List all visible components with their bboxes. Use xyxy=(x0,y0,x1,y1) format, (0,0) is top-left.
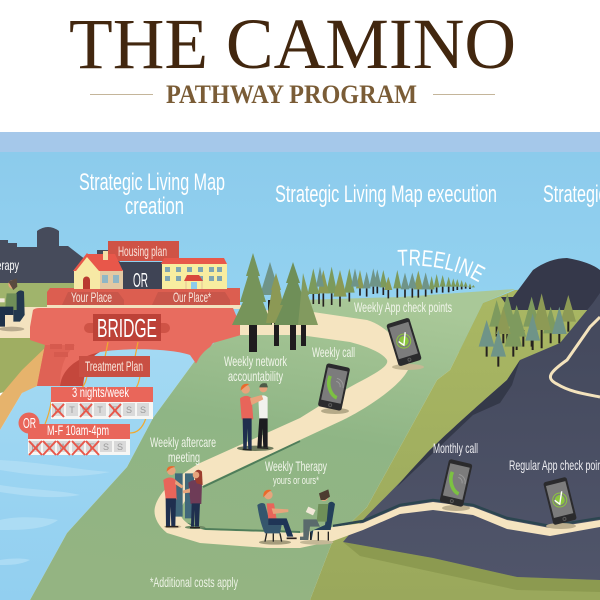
monthly call label: Monthly call xyxy=(433,440,478,456)
phone weekly call xyxy=(318,363,350,414)
schedule: M-F: M-F 10am-4pm xyxy=(47,422,109,438)
schedule: M-F: T xyxy=(46,442,52,452)
weekly therapy label xyxy=(265,458,327,487)
our place label: Our Place* xyxy=(173,289,211,305)
deck cream strip xyxy=(47,305,241,309)
OR circle xyxy=(18,412,40,434)
title: THE CAMINO xyxy=(69,4,516,84)
green land xyxy=(30,289,515,600)
schedule: 3 nights: T xyxy=(69,405,75,415)
weekly therapy label: yours or ours* xyxy=(273,475,319,487)
footnote: *Additional costs apply xyxy=(150,574,238,590)
heading: creation xyxy=(79,169,225,220)
dark city skyline xyxy=(0,227,162,290)
big tree trunks xyxy=(249,300,306,352)
connecting strings xyxy=(45,342,150,433)
aftercare label xyxy=(150,434,216,465)
schedule: M-F: S xyxy=(103,442,109,452)
people pair xyxy=(237,383,274,451)
olive shade under mountain xyxy=(343,542,600,592)
left road xyxy=(0,307,100,338)
water river xyxy=(0,345,200,600)
patient left xyxy=(0,278,25,331)
mountain xyxy=(343,293,600,580)
schedule: 3 nights xyxy=(51,384,153,419)
ground lower left xyxy=(0,336,50,393)
patient seated xyxy=(300,489,335,545)
meeting group xyxy=(163,466,205,529)
treeline curved label xyxy=(398,250,486,282)
bridge label: BRIDGE xyxy=(97,313,157,343)
schedule: M-F: S xyxy=(117,442,123,452)
road shadow xyxy=(180,441,300,532)
weekly network label: accountability xyxy=(228,368,283,384)
schedule: M-F: F xyxy=(89,442,95,452)
aftercare label: meeting xyxy=(168,449,200,465)
schedule: 3 nights: 3 nights/week xyxy=(72,384,130,400)
big trees xyxy=(232,253,318,325)
sky band xyxy=(0,132,600,152)
hill trees xyxy=(479,293,576,367)
treeline curved label: TREELINE xyxy=(398,250,486,282)
bridge deck xyxy=(47,288,240,305)
deck dark panels xyxy=(62,292,230,305)
olive hill xyxy=(310,285,600,600)
arch interior xyxy=(60,352,100,386)
schedule: 3 nights: W xyxy=(82,405,91,415)
heading: creation: creation xyxy=(125,193,184,220)
weekly call label: Weekly call xyxy=(312,344,355,360)
heading: execution: Strategic Living Map execution xyxy=(275,181,497,208)
weekly app label: Weekly App check points xyxy=(354,299,452,315)
winding road xyxy=(154,309,600,548)
aftercare label: Weekly aftercare xyxy=(150,434,216,450)
dark OR backdrop xyxy=(119,262,163,289)
weekly therapy label: Weekly Therapy xyxy=(265,458,327,474)
housing plan label xyxy=(108,241,179,261)
schedule: 3 nights: M xyxy=(54,405,62,415)
treatment plan label xyxy=(79,356,150,377)
house our place xyxy=(161,258,227,289)
schedule: M-F: M xyxy=(31,442,39,452)
mountain upper road xyxy=(550,317,600,397)
schedule: 3 nights: S xyxy=(126,405,132,415)
therapist seated xyxy=(257,490,297,545)
bridge label xyxy=(93,313,161,343)
heading: creation: Strategic Living Map xyxy=(79,169,225,196)
treatment plan label: Treatment Plan xyxy=(85,358,143,374)
OR circle: OR xyxy=(23,415,36,432)
phone monthly xyxy=(439,459,473,511)
sky xyxy=(0,152,600,352)
schedule: M-F xyxy=(28,422,130,455)
green inner hill xyxy=(160,337,380,470)
schedule: 3 nights: T xyxy=(97,405,103,415)
subtitle: PATHWAY PROGRAM xyxy=(166,80,417,109)
phone regular xyxy=(543,477,577,529)
schedule: M-F: W xyxy=(59,442,68,452)
your place label: Your Place xyxy=(71,289,112,305)
bridge pier xyxy=(37,345,75,386)
sand bank xyxy=(0,345,48,430)
weekly network label xyxy=(224,353,288,384)
schedule: 3 nights: S xyxy=(140,405,146,415)
bridge xyxy=(30,288,241,386)
house your place xyxy=(73,251,123,289)
phone weekly app xyxy=(386,317,424,370)
bridge body xyxy=(30,308,241,386)
bridge label band bumps xyxy=(84,323,170,333)
ground left xyxy=(0,283,80,311)
mountain shadow band xyxy=(397,360,520,487)
tree line xyxy=(308,267,475,307)
OR housing: OR xyxy=(133,270,148,292)
housing plan label: Housing plan xyxy=(118,243,167,259)
schedule: M-F: T xyxy=(75,442,81,452)
road shadow on mountain xyxy=(333,500,600,526)
bricks xyxy=(50,344,74,357)
water ripples xyxy=(0,460,110,565)
schedule: 3 nights: F xyxy=(112,405,118,415)
back rock xyxy=(501,258,600,310)
weekly network label: Weekly network xyxy=(224,353,288,369)
